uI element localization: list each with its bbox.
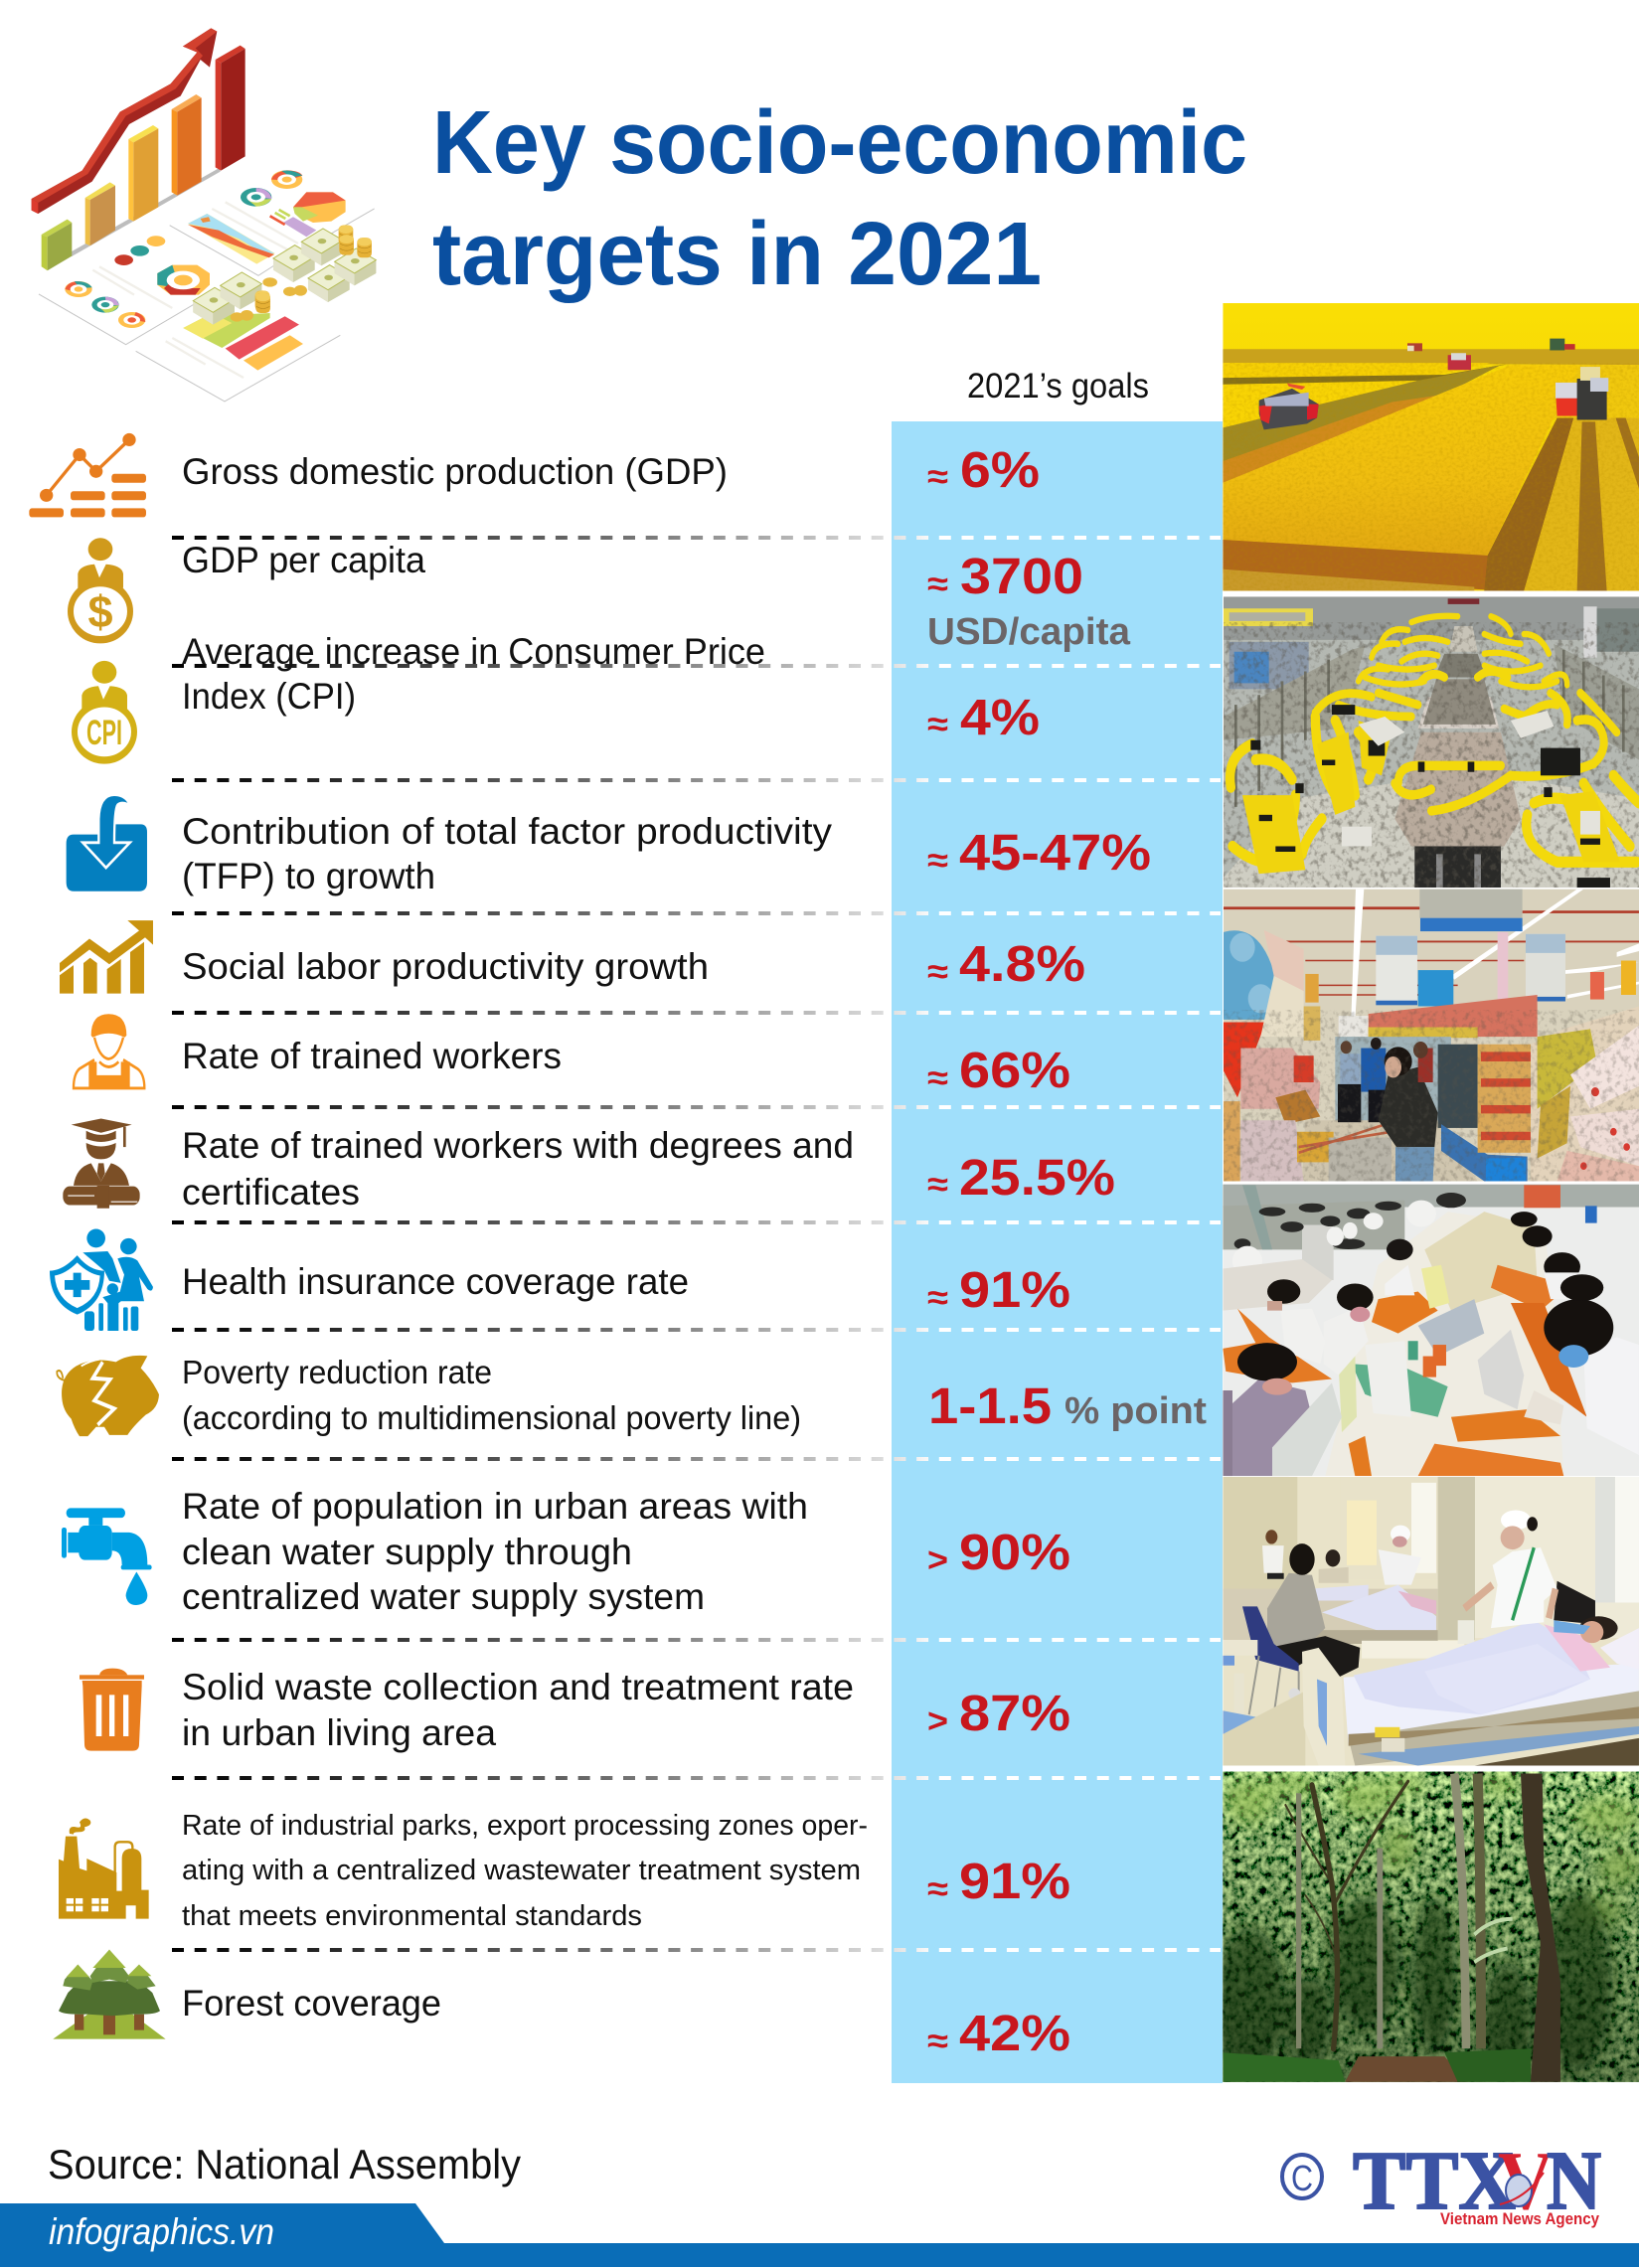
logo: TTXVN Vietnam News Agency: C (1291, 2158, 1313, 2198)
value: poverty 1-1.5 % point (928, 1377, 1207, 1434)
row: CPI (75, 631, 765, 760)
value: water over 90%: > (927, 1541, 948, 1579)
label: degrees and certificates: certificates (182, 1172, 360, 1213)
value: poverty 1-1.5 % point: 1-1.5 (928, 1377, 1052, 1434)
label: poverty reduction: Poverty reduction rate (182, 1354, 492, 1390)
label: trained workers: Rate of trained workers (182, 1036, 562, 1076)
label: degrees and certificates (182, 1125, 854, 1213)
icon: GDP line and bars (29, 433, 146, 517)
icon: factory (59, 1819, 149, 1919)
value: degrees 25.5%: ≈ (927, 1166, 948, 1204)
label: industrial parks: that meets environmental standards (182, 1900, 642, 1932)
label: CPI (182, 631, 765, 717)
label: TFP: Contribution of total factor productivity (182, 811, 833, 852)
photo: forest (1213, 1771, 1639, 2082)
panel: goals column background (892, 421, 1223, 2083)
value: labor productivity 4.8%: 4.8% (959, 935, 1085, 992)
goal values (927, 441, 1207, 2061)
icon: person with CPI (75, 661, 134, 760)
icon: rising bars and arrow (60, 920, 153, 994)
value: water over 90%: 90% (959, 1524, 1070, 1580)
value: GDP 6% (927, 441, 1040, 498)
footer band (0, 2203, 1639, 2267)
value: health insurance 91%: 91% (959, 1261, 1070, 1318)
value: GDP 6%: ≈ (927, 458, 948, 496)
value: trained workers 66%: 66% (959, 1042, 1070, 1098)
label: clean water: Rate of population in urban areas with (182, 1486, 808, 1527)
value: poverty 1-1.5 % point: % point (1065, 1390, 1207, 1432)
icon: worker (74, 1014, 144, 1088)
photo: car factory robots (1224, 596, 1639, 888)
value: degrees 25.5%: 25.5% (959, 1149, 1115, 1206)
logo: TTXVN Vietnam News Agency: V (1498, 2135, 1554, 2227)
icon: person with dollar (71, 538, 130, 640)
value: 3700 USD per capita: ≈ (927, 566, 948, 603)
icon: tray with down arrow (67, 795, 147, 891)
label: industrial parks (182, 1810, 868, 1932)
label: CPI: Average increase in Consumer Price (182, 631, 765, 672)
row: health insurance (50, 1229, 689, 1331)
icon: trash bin (80, 1669, 144, 1751)
value: trained workers 66%: ≈ (927, 1059, 948, 1097)
photo: supermarket (1224, 890, 1639, 1182)
logo: TTXVN Vietnam News Agency (1282, 2135, 1601, 2228)
label: CPI: Index (CPI) (182, 676, 356, 717)
value: CPI 4%: 4% (960, 689, 1040, 745)
icon: graduate (63, 1119, 140, 1209)
row: TFP (67, 795, 833, 896)
value: industrial parks 91%: 91% (959, 1853, 1070, 1909)
value: TFP 45-47%: 45-47% (959, 824, 1151, 881)
row: solid waste (80, 1667, 854, 1753)
row: trained workers (74, 1014, 562, 1088)
value: CPI 4% (927, 689, 1040, 745)
row: GDP (29, 433, 728, 517)
row: degrees and certificates (63, 1119, 854, 1213)
row: labor productivity (60, 920, 709, 994)
label: clean water: centralized water supply system (182, 1576, 705, 1617)
label: poverty reduction (182, 1354, 801, 1436)
label: TFP: (TFP) to growth (182, 856, 435, 896)
column heading: 2021's goals: 2021’s goals (967, 367, 1149, 405)
label: GDP: Gross domestic production (GDP) (182, 451, 728, 492)
icon: person with CPI: CPI (86, 714, 122, 752)
value: industrial parks 91%: ≈ (927, 1870, 948, 1908)
source note: Source: National Assembly (48, 2141, 521, 2187)
value: 3700 USD per capita: USD/capita (927, 611, 1131, 653)
label: industrial parks: Rate of industrial parks, export processing zones oper- (182, 1810, 868, 1842)
label: forest: Forest coverage (182, 1983, 441, 2024)
label: solid waste: Solid waste collection and treatment rate (182, 1667, 854, 1707)
label: clean water: clean water supply through (182, 1532, 632, 1572)
value: 3700 USD per capita: 3700 (960, 548, 1083, 604)
label: solid waste (182, 1667, 854, 1753)
value: waste over 87%: 87% (959, 1685, 1070, 1741)
photo: garment workers (1223, 1185, 1639, 1476)
value: forest 42%: 42% (959, 2005, 1070, 2061)
icon: trees (53, 1950, 166, 2039)
title (432, 93, 1247, 304)
row: forest (53, 1950, 441, 2039)
logo: TTXVN Vietnam News Agency: TTX (1353, 2135, 1516, 2227)
label: solid waste: in urban living area (182, 1712, 496, 1753)
dashed row dividers (172, 538, 1221, 1950)
illustration: isometric charts and money (32, 28, 376, 402)
icon: broken piggy bank (57, 1356, 159, 1436)
label: health insurance: Health insurance coverage rate (182, 1261, 689, 1302)
value: TFP 45-47%: ≈ (927, 842, 948, 880)
photo: hospital ward (1223, 1477, 1639, 1766)
footer site name: infographics.vn (49, 2211, 274, 2252)
photo: rice harvest (1223, 303, 1639, 590)
label: poverty reduction: (according to multidimensional poverty line) (182, 1399, 801, 1436)
title: Key socio-economic (432, 93, 1247, 193)
row: poverty reduction (57, 1354, 801, 1436)
label: clean water (182, 1486, 808, 1617)
value: 3700 USD per capita (927, 548, 1131, 653)
title: targets in 2021 (432, 205, 1042, 304)
label: degrees and certificates: Rate of trained workers with degrees and (182, 1125, 854, 1166)
label: TFP (182, 811, 833, 896)
value: waste over 87%: > (927, 1702, 948, 1740)
value: GDP 6%: 6% (960, 441, 1040, 498)
logo: TTXVN Vietnam News Agency: N (1547, 2135, 1601, 2227)
row: clean water (62, 1486, 808, 1617)
label: industrial parks: ating with a centralized wastewater treatment system (182, 1855, 861, 1886)
label: GDP per capita: GDP per capita (182, 540, 425, 580)
icon: person with dollar: $ (87, 586, 113, 637)
value: health insurance 91%: ≈ (927, 1279, 948, 1317)
value: forest 42%: ≈ (927, 2023, 948, 2060)
label: labor productivity: Social labor productivity growth (182, 946, 709, 987)
value: CPI 4%: ≈ (927, 706, 948, 743)
row: industrial parks (59, 1810, 868, 1932)
row: GDP per capita (71, 538, 425, 640)
logo: TTXVN Vietnam News Agency: Vietnam News Agency (1440, 2209, 1599, 2228)
value: labor productivity 4.8%: ≈ (927, 953, 948, 991)
icon: water tap (62, 1508, 152, 1605)
icon: family and shield (50, 1229, 153, 1331)
